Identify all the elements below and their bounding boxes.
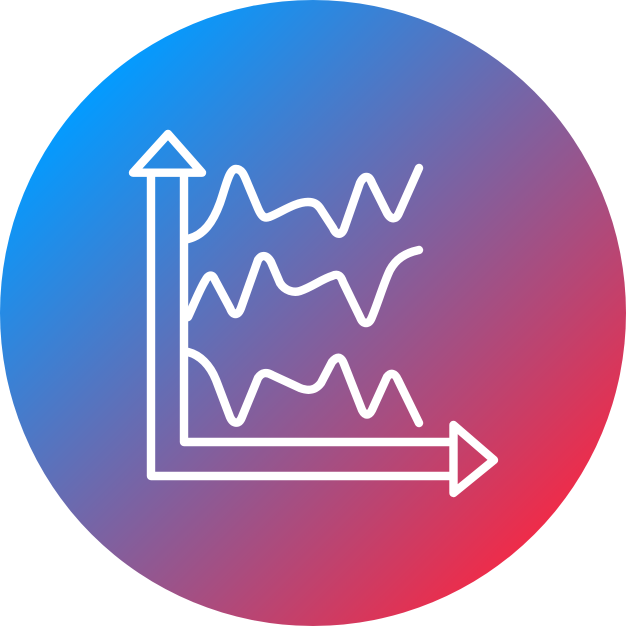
bottom wavy line — [188, 352, 419, 423]
top wavy line — [188, 168, 419, 239]
chart axes with arrows — [133, 134, 494, 493]
middle wavy line — [188, 250, 419, 323]
